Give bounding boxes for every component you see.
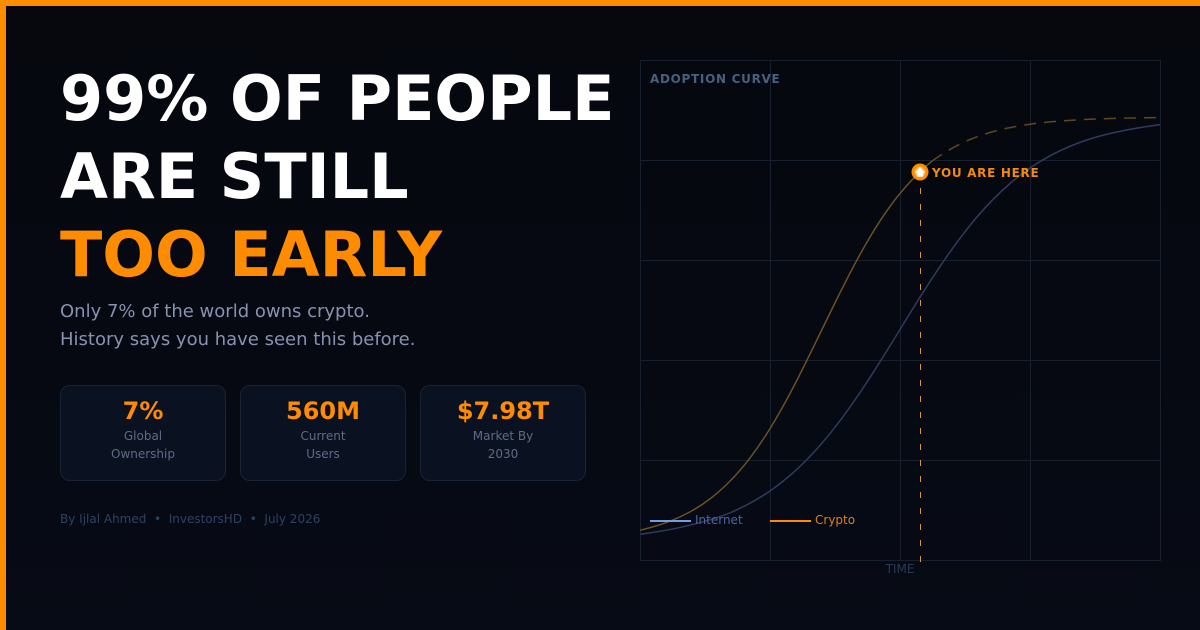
stat card: global ownership [60, 385, 226, 481]
stat card: global ownership: 7% [123, 397, 163, 425]
title [60, 62, 614, 291]
label: you are here: YOU ARE HERE [931, 166, 1039, 180]
subtitle text [60, 301, 415, 350]
stat card: current users: Current [300, 429, 346, 443]
legend: crypto [770, 513, 855, 527]
curve: internet [640, 125, 1160, 534]
icon: you are here marker [912, 164, 928, 180]
stat card: global ownership: Global [124, 429, 162, 443]
legend: internet [650, 513, 743, 527]
curve: crypto projected [932, 118, 1160, 161]
stat card: current users [240, 385, 406, 481]
title: 99% OF PEOPLE [60, 62, 614, 135]
legend: crypto: Crypto [815, 513, 855, 527]
chart heading: ADOPTION CURVE [650, 72, 780, 86]
dashed marker line [920, 172, 922, 563]
title: TOO EARLY [60, 218, 442, 291]
legend: internet: Internet [695, 513, 743, 527]
stat card: global ownership: Ownership [111, 447, 175, 461]
stat card: current users: Users [306, 447, 340, 461]
stat card: market by 2030: $7.98T [457, 397, 549, 425]
stat card: market by 2030: Market By [473, 429, 533, 443]
stat card: market by 2030: 2030 [488, 447, 518, 461]
stat card: current users: 560M [286, 397, 360, 425]
axis label: time: TIME [885, 562, 914, 576]
title: ARE STILL [60, 140, 409, 213]
subtitle text: Only 7% of the world owns crypto. [60, 301, 370, 322]
curve: crypto actual [640, 161, 932, 530]
subtitle text: History says you have seen this before. [60, 329, 415, 350]
stat card: market by 2030 [420, 385, 586, 481]
byline: By Ijlal Ahmed • InvestorsHD • July 2026 [60, 512, 320, 526]
